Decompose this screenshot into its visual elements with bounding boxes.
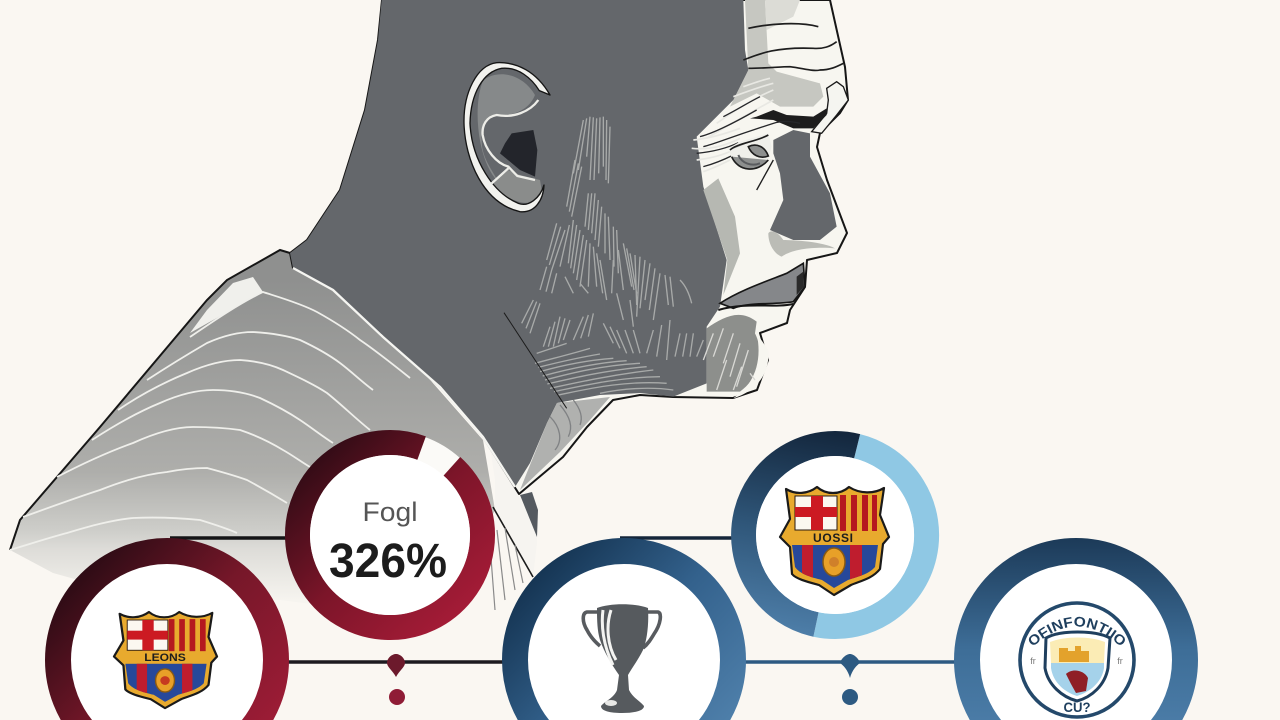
ring: city crest bbox=[954, 538, 1198, 720]
ear lobe shading bbox=[490, 170, 542, 203]
ear inner shadow bbox=[500, 130, 537, 177]
ear interior shading bbox=[478, 74, 535, 182]
crest: left shield bbox=[114, 612, 218, 708]
nose shadow bbox=[770, 130, 837, 240]
eye bbox=[728, 133, 773, 190]
stat label: Fogl bbox=[362, 497, 418, 527]
crest text: LEONS bbox=[144, 652, 186, 664]
crest: round city badge bbox=[1018, 601, 1136, 719]
mouth and moustache bbox=[718, 263, 805, 310]
eye wrinkles bbox=[692, 78, 773, 172]
badge side marks: fr bbox=[1030, 656, 1036, 666]
forehead wrinkles bbox=[743, 24, 843, 70]
stat ring: final percentage bbox=[286, 431, 494, 639]
marker: maroon pin and dot bbox=[387, 654, 405, 705]
portrait illustration bbox=[10, 0, 848, 620]
head silhouette bbox=[290, 0, 848, 494]
brow bbox=[750, 108, 827, 128]
face details bbox=[290, 0, 848, 490]
ear bbox=[464, 63, 550, 212]
connector lines bbox=[170, 538, 958, 662]
neck light patch bbox=[520, 397, 610, 490]
ring: trophy bbox=[515, 551, 733, 720]
ear swirl bbox=[483, 100, 538, 183]
crest text: UOSSI bbox=[813, 531, 853, 545]
neck and shoulder edge line bbox=[293, 268, 515, 487]
forehead shading bbox=[730, 0, 823, 107]
cheek highlight bbox=[703, 178, 740, 295]
badge top text: OFINFONTIIO bbox=[1028, 616, 1125, 645]
ear rim bbox=[464, 63, 550, 212]
ring: left club bbox=[58, 551, 276, 720]
beard stubble hatching bbox=[522, 117, 703, 360]
main dark gray head shape bbox=[290, 0, 748, 487]
stat value: 326% bbox=[329, 535, 447, 588]
badge bottom text: CU? bbox=[1064, 699, 1090, 715]
marker: blue pin and dot bbox=[840, 654, 860, 705]
badge side marks right: fr bbox=[1117, 656, 1123, 666]
stat ring: club crest bbox=[732, 432, 938, 638]
icon: trophy bbox=[583, 604, 660, 713]
shoulder bbox=[10, 240, 538, 620]
crest: right shield bbox=[780, 487, 890, 596]
brow fold bbox=[812, 82, 848, 133]
forehead pale patch bbox=[765, 0, 800, 30]
jaw line bbox=[504, 313, 567, 408]
chin beard shading bbox=[707, 315, 760, 392]
badge shield bbox=[1045, 632, 1110, 701]
nostril shading bbox=[768, 231, 835, 257]
